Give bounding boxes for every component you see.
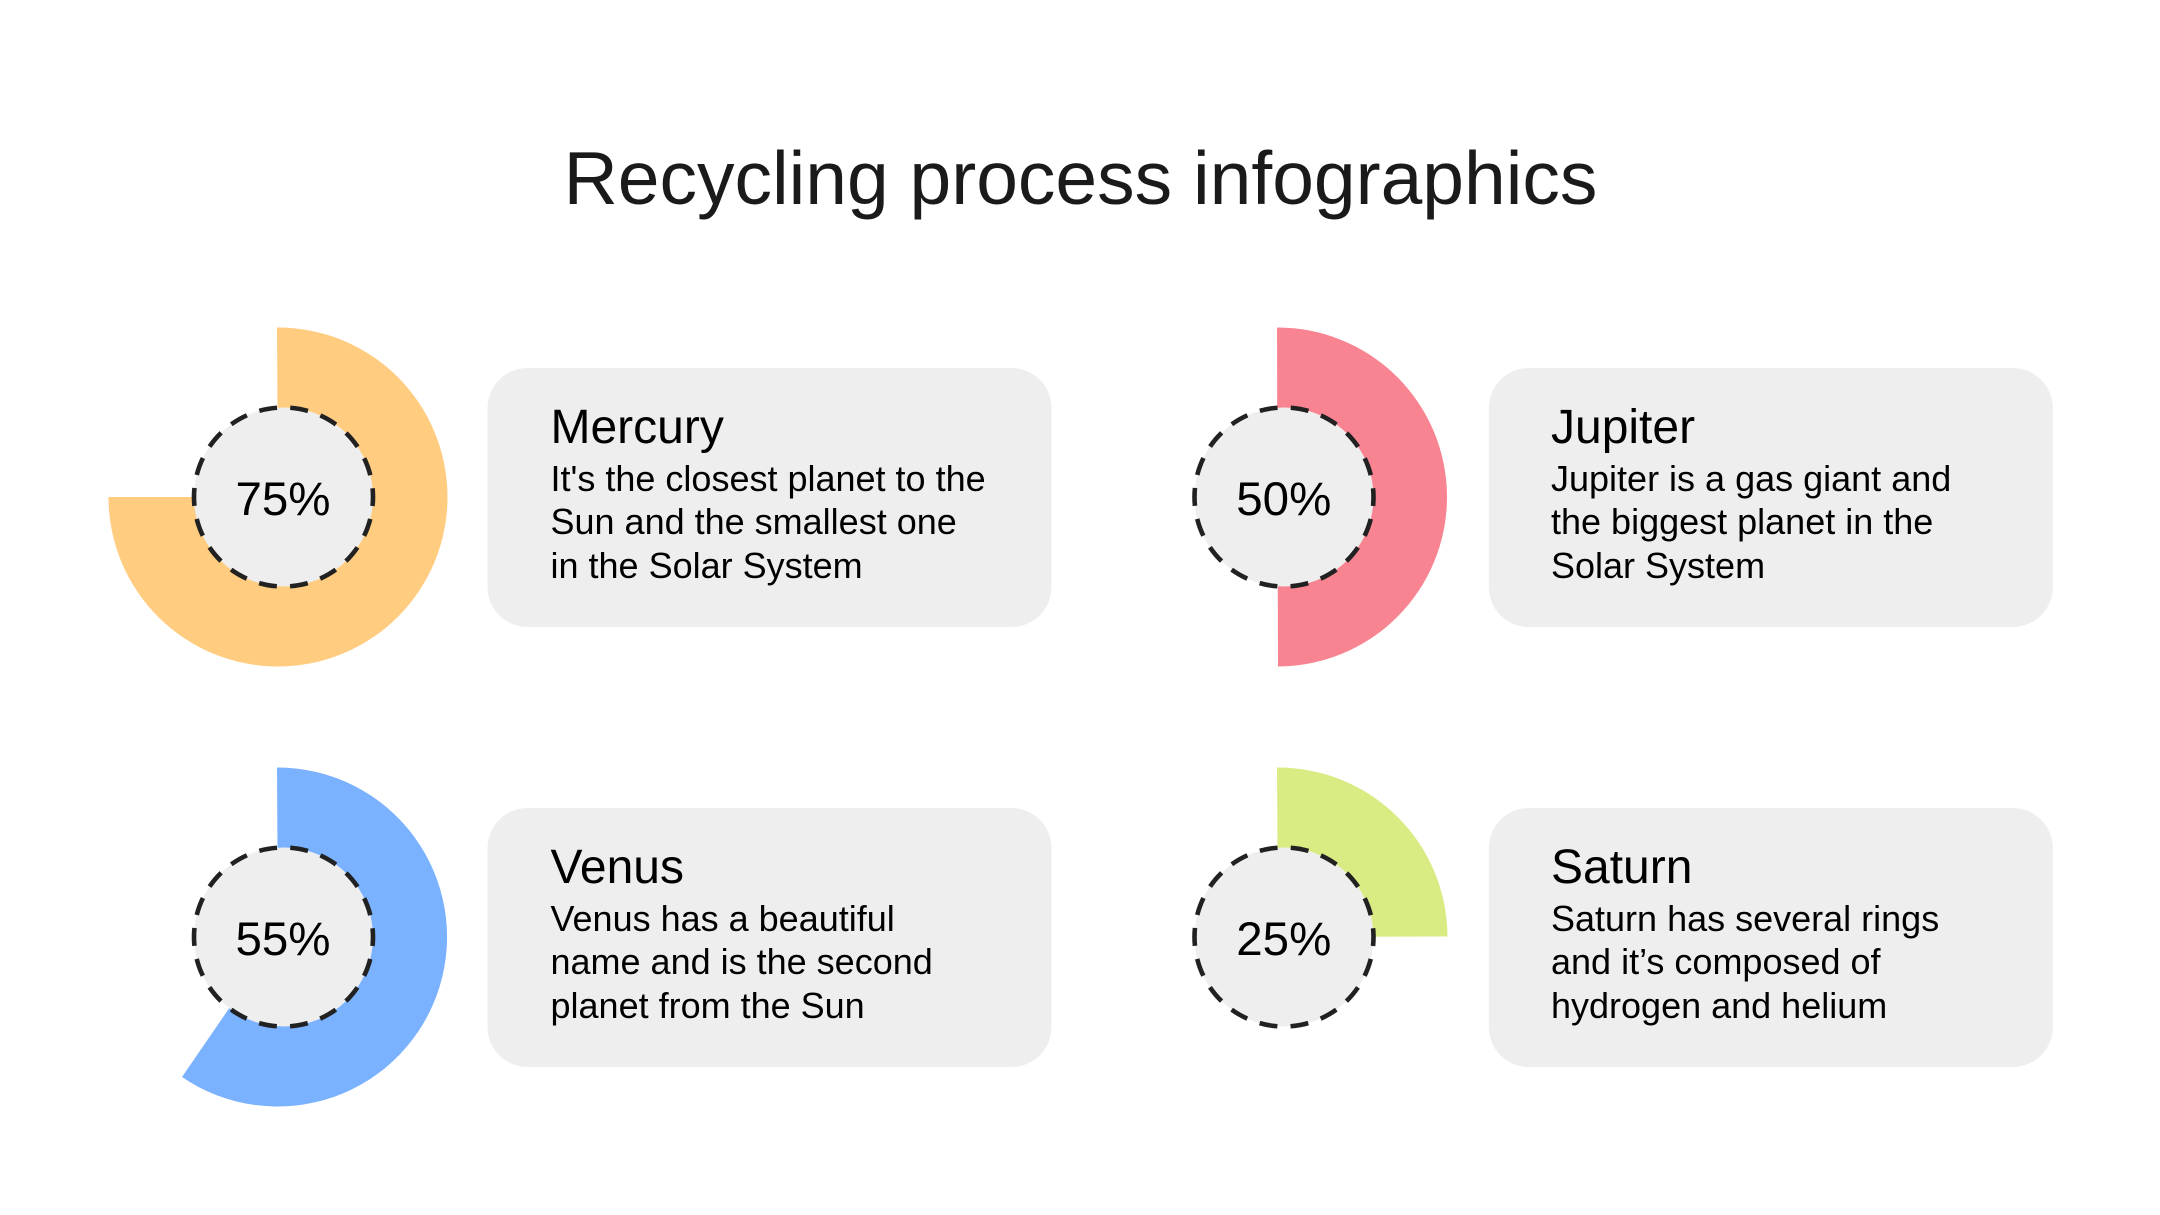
- value: Mercury 75%: 75%: [235, 473, 331, 526]
- heading: Venus: Venus: [550, 841, 684, 894]
- title: Recycling process infographics: [564, 136, 1597, 220]
- panel: Saturn: [1194, 767, 2053, 1067]
- description: Saturn: hydrogen and helium: [1551, 985, 1887, 1026]
- chart: Jupiter 50% wedge: [1277, 327, 1447, 666]
- heading: Saturn: Saturn: [1551, 841, 1692, 894]
- chart: Saturn 25% wedge: [1277, 767, 1448, 937]
- card: Mercury: [488, 368, 1052, 627]
- description: Mercury: in the Solar System: [550, 545, 863, 586]
- heading: Mercury: Mercury: [550, 401, 724, 454]
- description: Venus: name and is the second: [550, 941, 933, 982]
- value: Saturn 25%: 25%: [1236, 913, 1331, 966]
- panel: Mercury: [108, 327, 1052, 666]
- dashed circle: Saturn: [1194, 848, 1374, 1026]
- description: Jupiter: the biggest planet in the: [1551, 501, 1933, 542]
- value: Venus 55%: 55%: [235, 913, 331, 966]
- heading: Jupiter: Jupiter: [1551, 401, 1695, 454]
- panel: Jupiter: [1194, 327, 2053, 666]
- card: Saturn: [1489, 808, 2053, 1067]
- dashed circle: Venus: [194, 848, 373, 1026]
- dashed circle: Mercury: [194, 408, 373, 586]
- description: Jupiter: Solar System: [1551, 545, 1765, 586]
- value: Jupiter 50%: 50%: [1236, 473, 1331, 526]
- dashed circle: Jupiter: [1194, 408, 1374, 586]
- chart: Mercury 75% wedge: [108, 327, 448, 666]
- description: Jupiter: Jupiter is a gas giant and: [1551, 458, 1951, 499]
- description: Mercury: It's the closest planet to the: [550, 458, 986, 499]
- panel: Venus: [182, 767, 1052, 1106]
- chart: Venus 55% wedge: [182, 767, 447, 1106]
- description: Saturn: and it’s composed of: [1551, 941, 1882, 982]
- card: Venus: [488, 808, 1052, 1067]
- description: Saturn: Saturn has several rings: [1551, 898, 1939, 939]
- description: Venus: planet from the Sun: [550, 985, 865, 1026]
- description: Venus: Venus has a beautiful: [550, 898, 895, 939]
- description: Mercury: Sun and the smallest one: [550, 501, 957, 542]
- card: Jupiter: [1489, 368, 2053, 627]
